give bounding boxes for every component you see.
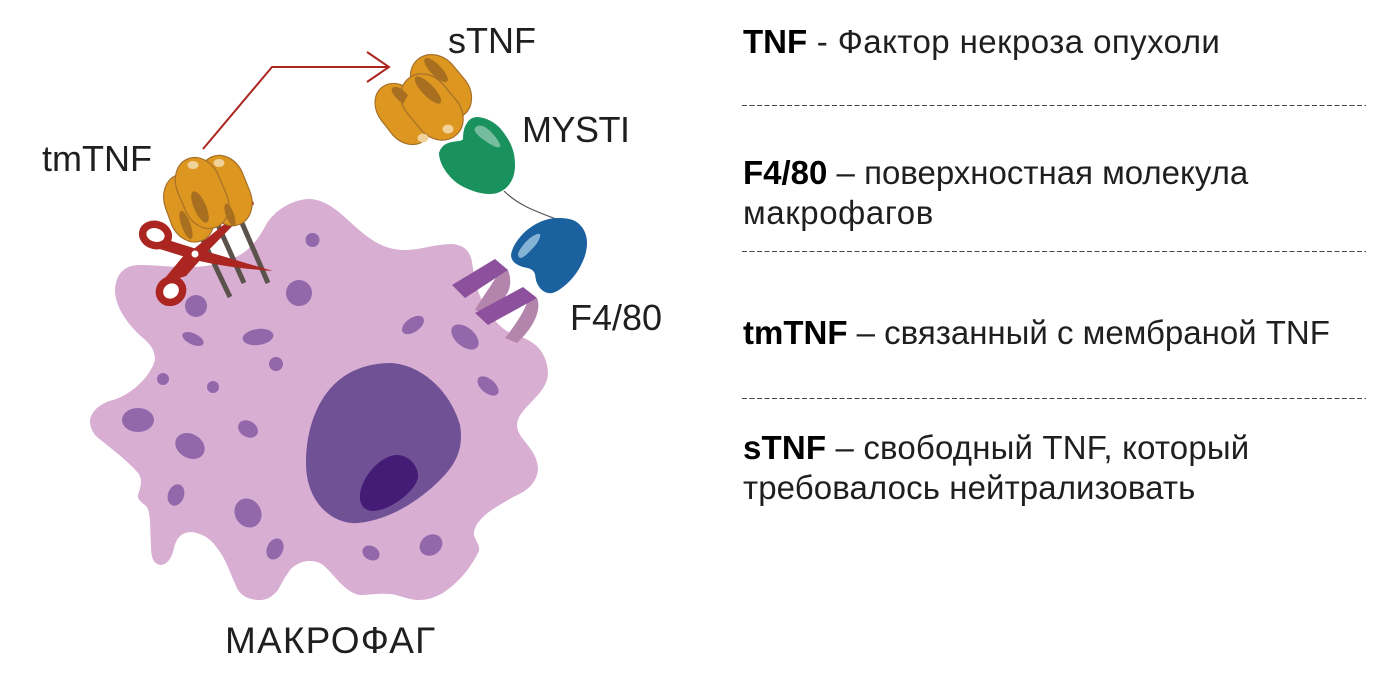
label: tmTNF: tmTNF [42, 138, 152, 179]
nucleolus [360, 455, 418, 511]
label: sTNF: sTNF [448, 20, 536, 61]
definition: sTNF [743, 429, 1249, 506]
definition: F4/80 [743, 154, 1248, 231]
arrow from tmTNF to sTNF [203, 52, 389, 149]
definition: sTNF: требовалось нейтрализовать [743, 469, 1195, 506]
tmTNF trimer [156, 148, 260, 248]
organelles [122, 233, 502, 564]
definition: F4/80: макрофагов [743, 194, 934, 231]
nucleus [306, 363, 461, 523]
sTNF trimer [366, 45, 482, 154]
macrophage cell body [90, 199, 548, 600]
definition: F4/80: F4/80 – поверхностная молекула [743, 154, 1248, 191]
definition: sTNF: sTNF – свободный TNF, который [743, 429, 1249, 466]
scissors back blade [190, 201, 254, 258]
MYSTI green domain [439, 117, 515, 194]
label: F4/80: F4/80 [570, 297, 662, 338]
F4/80-binding blue domain [511, 218, 587, 293]
definition: tmTNF: tmTNF – связанный с мембраной TNF [743, 314, 1330, 351]
F4/80 receptor [452, 259, 538, 343]
connector line between MYSTI domains [504, 191, 556, 219]
diagram: macrophage with TNF and MYSTI [90, 51, 587, 600]
tmTNF stems [203, 223, 268, 297]
label: macrophage: МАКРОФАГ [225, 620, 436, 661]
label: MYSTI: MYSTI [522, 109, 630, 150]
definition: TNF: TNF - Фактор некроза опухоли [743, 23, 1220, 60]
scissors [140, 221, 273, 307]
